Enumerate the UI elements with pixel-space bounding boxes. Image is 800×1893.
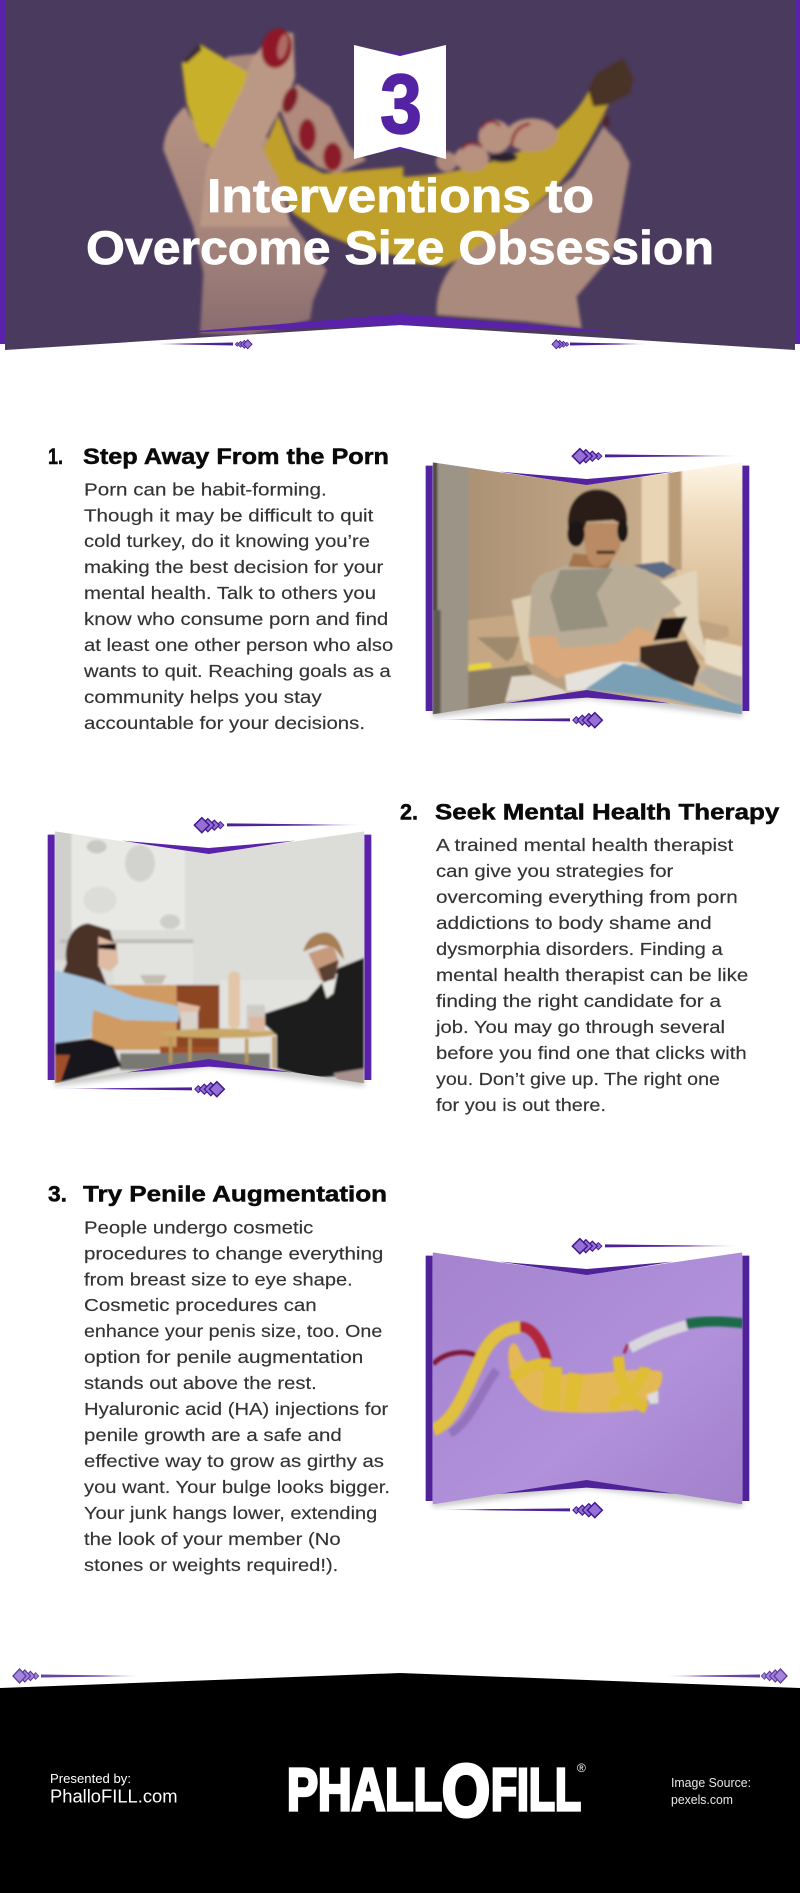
- ornament bottom: [435, 1503, 602, 1518]
- body 1: mental health. Talk to others you: [84, 583, 376, 603]
- body 1: making the best decision for your: [84, 557, 383, 577]
- body 3: Cosmetic procedures can: [84, 1295, 317, 1315]
- footer background: [0, 1673, 800, 1893]
- body 1: Though it may be difficult to quit: [84, 505, 373, 525]
- wedge bottom: [127, 1059, 292, 1072]
- image source: Image Source:: [671, 1776, 751, 1790]
- ornament right: [552, 340, 650, 349]
- body 3: effective way to grow as girthy as: [84, 1451, 384, 1471]
- wedge top: [500, 472, 673, 485]
- body 2: you. Don’t give up. The right one: [436, 1069, 720, 1089]
- body 3: Hyaluronic acid (HA) injections for: [84, 1399, 388, 1419]
- body 2: finding the right candidate for a: [436, 991, 721, 1011]
- body 2: dysmorphia disorders. Finding a: [436, 939, 723, 959]
- body 3: stands out above the rest.: [84, 1373, 317, 1393]
- body 2: overcoming everything from porn: [436, 887, 738, 907]
- body 2: can give you strategies for: [436, 861, 673, 881]
- frame bars: [426, 1256, 749, 1501]
- ornament top: [572, 1239, 743, 1254]
- section 2 text: [400, 800, 780, 1115]
- frame bars: [48, 835, 371, 1080]
- frame bars: [426, 466, 749, 711]
- image source: [671, 1776, 751, 1807]
- body 2: [435, 835, 748, 1115]
- shadow: [433, 1477, 742, 1507]
- heading 2: Seek Mental Health Therapy: [435, 800, 780, 825]
- presented by: Presented by:: [50, 1772, 131, 1786]
- panel: header: [0, 0, 800, 360]
- panel: footer: [0, 1669, 800, 1893]
- body 1: cold turkey, do it knowing you’re: [84, 531, 370, 551]
- body 2: mental health therapist can be like: [436, 965, 748, 985]
- shadow: [433, 687, 742, 717]
- body 3: option for penile augmentation: [84, 1347, 363, 1367]
- body 1: community helps you stay: [84, 687, 322, 707]
- body 3: from breast size to eye shape.: [84, 1269, 353, 1289]
- title: [86, 169, 714, 274]
- body 1: know who consume porn and find: [84, 609, 388, 629]
- body 3: enhance your penis size, too. One: [84, 1321, 382, 1341]
- body 3: the look of your member (No: [84, 1529, 341, 1549]
- logo: FILL: [491, 1757, 581, 1823]
- heading 3: 3.: [48, 1182, 67, 1207]
- heading 1: 1.: [48, 444, 63, 469]
- ornament top: [572, 449, 743, 464]
- body 2: before you find one that clicks with: [436, 1043, 747, 1063]
- body 3: People undergo cosmetic: [84, 1217, 314, 1237]
- body 2: addictions to body shame and: [436, 913, 712, 933]
- body 1: [83, 479, 393, 733]
- body 2: A trained mental health therapist: [436, 835, 733, 855]
- body 1: accountable for your decisions.: [84, 713, 365, 733]
- body 3: [84, 1217, 390, 1575]
- purple chevron: [173, 314, 633, 333]
- title: Overcome Size Obsession: [86, 221, 714, 274]
- body 3: stones or weights required!).: [84, 1555, 338, 1575]
- logo: ®: [577, 1761, 586, 1775]
- photo: banana wrapped in measuring tape: [430, 1250, 747, 1510]
- ornament left: [153, 340, 252, 349]
- body 1: wants to quit. Reaching goals as a: [83, 661, 391, 681]
- heading 2: 2.: [400, 800, 418, 825]
- body 2: job. You may go through several: [435, 1017, 725, 1037]
- panel: photo 2: [48, 818, 371, 1097]
- body 1: Porn can be habit-forming.: [84, 479, 327, 499]
- presented by: [50, 1772, 178, 1807]
- logo: PHALL: [287, 1757, 442, 1823]
- shadow: [55, 1056, 364, 1086]
- wedge bottom: [497, 1479, 678, 1494]
- ornament left: [13, 1669, 143, 1683]
- wedge top: [122, 841, 295, 854]
- photo: therapy session: [50, 827, 370, 1090]
- logo: [287, 1751, 586, 1832]
- ornament bottom: [57, 1082, 224, 1097]
- wedge top: [500, 1262, 673, 1275]
- logo: O: [442, 1751, 490, 1832]
- image source: pexels.com: [671, 1793, 733, 1807]
- heading 1: Step Away From the Porn: [83, 444, 389, 469]
- body 3: you want. Your bulge looks bigger.: [84, 1477, 390, 1497]
- section 3 text: [48, 1182, 390, 1575]
- body 3: Your junk hangs lower, extending: [84, 1503, 377, 1523]
- body 3: procedures to change everything: [84, 1243, 383, 1263]
- panel: photo 1: [426, 449, 749, 728]
- ornament bottom: [435, 713, 602, 728]
- number 3: 3: [380, 57, 422, 151]
- panel: photo 3: [426, 1239, 749, 1518]
- number banner: [354, 45, 446, 159]
- wedge bottom: [505, 690, 670, 703]
- title: Interventions to: [207, 169, 594, 222]
- header photo: hands holding banana: [0, 0, 800, 360]
- body 1: at least one other person who also: [84, 635, 393, 655]
- section 1 text: [48, 444, 393, 733]
- ornament right: [663, 1669, 787, 1683]
- photo: man with headphones on phone: [430, 460, 747, 720]
- ornament top: [194, 818, 365, 833]
- body 2: for you is out there.: [436, 1095, 606, 1115]
- body 3: penile growth are a safe and: [84, 1425, 342, 1445]
- purple side bars: [0, 0, 800, 344]
- presented by: PhalloFILL.com: [50, 1786, 178, 1807]
- heading 3: Try Penile Augmentation: [83, 1182, 387, 1207]
